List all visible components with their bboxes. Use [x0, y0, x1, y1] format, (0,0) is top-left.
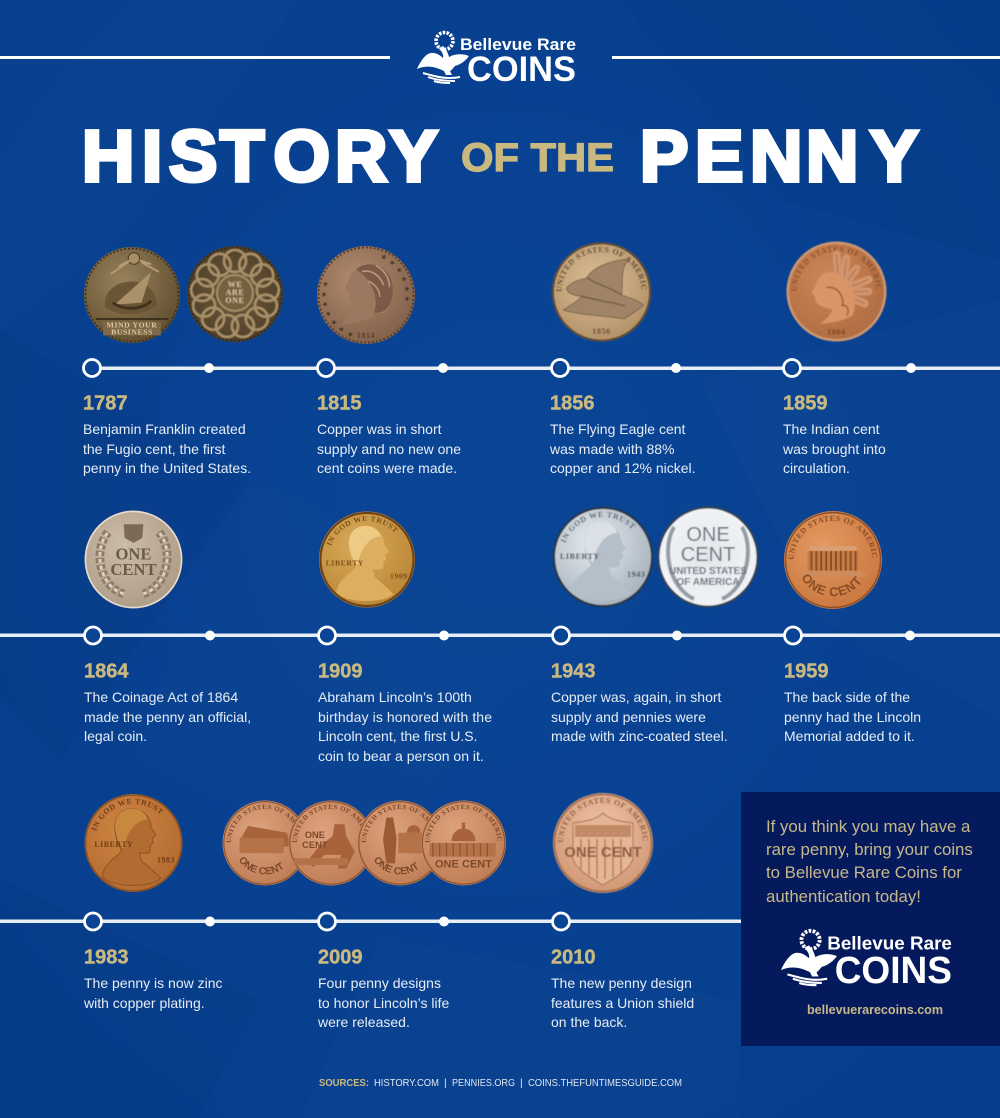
sources: HISTORY.COM: [374, 1077, 439, 1089]
sources: [319, 1077, 682, 1089]
logo: Bellevue Rare Coins: [417, 32, 576, 89]
entry 1856: The Flying Eagle cent: [550, 421, 686, 437]
coin: 1864 one cent wreath: CENT: [110, 560, 157, 579]
entry 2010: on the back.: [551, 1014, 627, 1030]
timeline row 3: [0, 913, 742, 930]
entry 1959: penny had the Lincoln: [784, 709, 921, 725]
sources: SOURCES:: [319, 1078, 369, 1089]
coin: 1983 lincoln: LIBERTY: [94, 840, 133, 849]
entry 1787: penny in the United States.: [83, 460, 251, 476]
entry 1864: legal coin.: [84, 728, 147, 744]
panel: call to action: [741, 792, 1000, 1046]
entry 1864: The Coinage Act of 1864: [84, 689, 238, 705]
coin: us capitol: ONE CENT: [435, 859, 492, 871]
coin: 1909 lincoln cent: LIBERTY: [326, 558, 364, 567]
logo: Bellevue Rare Coins: Bellevue Rare: [460, 35, 576, 54]
callout text: authentication today!: [766, 887, 921, 906]
entry 1983: 1983: [84, 946, 128, 968]
entry 1959: Memorial added to it.: [784, 728, 915, 744]
entry 1859: was brought into: [782, 441, 886, 457]
entry 1815: [317, 392, 461, 476]
coin: 2010 union shield: ONE CENT: [564, 844, 642, 861]
coin: Fugio cent back: ONE: [225, 296, 245, 305]
coin: 1943 steel front: 1943: [627, 570, 645, 579]
coin: log cabin: [222, 800, 298, 886]
coin: young lincoln reading: UNITED STATES OF AMERICA: [292, 804, 363, 842]
entry 2010: The new penny design: [551, 975, 692, 991]
entry 1787: [83, 392, 251, 476]
entry 2009: to honor Lincoln’s life: [318, 995, 449, 1011]
coin: 1959 lincoln memorial: UNITED STATES OF AMERICA: [788, 516, 878, 560]
entry 1983: [83, 946, 223, 1011]
entry 1983: with copper plating.: [83, 995, 205, 1011]
coin: 1909 lincoln cent: 1909: [390, 572, 408, 581]
coin: 1983 lincoln: IN GOD WE TRUST: [91, 798, 164, 831]
entry 1943: supply and pennies were: [551, 709, 706, 725]
coin: Fugio cent back: [187, 246, 283, 342]
coin: lincoln at capitol: [358, 800, 432, 886]
entry 2010: features a Union shield: [551, 995, 694, 1011]
coin: 1983 lincoln: 1983: [157, 856, 175, 865]
coin: Fugio cent front: BUSINESS: [111, 327, 153, 336]
entry 2010: 2010: [551, 946, 596, 968]
coin: 1859 indian head: [786, 240, 888, 342]
entry 2009: [317, 946, 449, 1030]
sources: PENNIES.ORG: [452, 1077, 515, 1089]
coin: 1856 flying eagle: [551, 242, 652, 342]
entry 1909: Lincoln cent, the first U.S.: [318, 728, 478, 744]
title: HISTORY: [82, 116, 438, 197]
coin: 1943 steel front: [552, 506, 654, 608]
coin: 1943 steel back: CENT: [681, 544, 735, 566]
entry 1856: 1856: [550, 392, 594, 414]
coin: lincoln at capitol: UNITED STATES OF AMERICA: [362, 804, 428, 842]
entry 1787: 1787: [83, 392, 128, 414]
entry 1856: copper and 12% nickel.: [550, 460, 696, 476]
entry 1943: 1943: [551, 660, 596, 682]
entry 1859: [782, 392, 886, 476]
title: [82, 116, 918, 197]
coin: Fugio cent front: [84, 247, 180, 343]
coin: 1943 steel back: OF AMERICA: [677, 577, 739, 588]
timeline row 2: [0, 627, 1000, 644]
coin: 1943 steel back: [658, 506, 758, 608]
header rule left: [0, 56, 390, 59]
callout text: rare penny, bring your coins: [766, 840, 973, 859]
title: OF THE: [461, 136, 614, 180]
entry 1943: made with zinc-coated steel.: [551, 728, 728, 744]
entry 1815: supply and no new one: [317, 441, 461, 457]
entry 1859: circulation.: [783, 460, 850, 476]
coin: 1815 classic head: ★★★★★★★: [321, 282, 352, 337]
entry 1815: cent coins were made.: [317, 460, 457, 476]
coin: lincoln at capitol: ONE CENT: [374, 857, 418, 874]
entry 1983: The penny is now zinc: [84, 975, 223, 991]
coin: 1859 indian head: 1864: [827, 328, 846, 336]
timeline row 1: [84, 360, 1000, 376]
coin: Fugio cent back: ARE: [226, 288, 244, 297]
entry 1909: Abraham Lincoln’s 100th: [318, 689, 472, 705]
entry 1864: made the penny an official,: [84, 709, 251, 725]
panel logo: Bellevue Rare: [827, 933, 952, 954]
coin: young lincoln reading: [288, 800, 366, 886]
entry 1859: The Indian cent: [783, 421, 880, 437]
panel logo: [781, 931, 952, 991]
callout text: [766, 817, 973, 906]
entry 2009: 2009: [318, 946, 362, 968]
coin: 1856 flying eagle: UNITED STATES OF AMERICA: [556, 246, 647, 292]
coin: 1909 lincoln cent: IN GOD WE TRUST: [326, 516, 398, 546]
coins: 2009 four lincoln designs: [222, 800, 506, 886]
callout text: If you think you may have a: [766, 817, 971, 836]
coin: 1943 steel back: UNITED STATES: [669, 566, 747, 577]
callout text: to Bellevue Rare Coins for: [766, 863, 962, 882]
logo: Bellevue Rare Coins: COINS: [467, 50, 576, 89]
entry 1856: was made with 88%: [549, 441, 675, 457]
entry 2009: Four penny designs: [318, 975, 441, 991]
coin: 1959 lincoln memorial: [784, 511, 882, 609]
entry 1909: 1909: [318, 660, 362, 682]
entry 1959: 1959: [784, 660, 828, 682]
coin: 1864 one cent wreath: ONE: [115, 545, 152, 564]
entry 1787: Benjamin Franklin created: [83, 421, 246, 437]
entry 1859: 1859: [783, 392, 828, 414]
entry 1959: [784, 660, 921, 744]
header rule right: [612, 56, 1000, 59]
entry 1909: birthday is honored with the: [318, 709, 492, 725]
coin: 1815 classic head: [317, 246, 415, 344]
entry 1909: [318, 660, 492, 764]
coin: log cabin: ONE CENT: [240, 857, 282, 874]
coin: 1959 lincoln memorial: ONE CENT: [802, 574, 860, 596]
entry 1787: the Fugio cent, the first: [83, 441, 226, 457]
sources: COINS.THEFUNTIMESGUIDE.COM: [528, 1077, 682, 1089]
entry 1864: 1864: [84, 660, 129, 682]
coin: Fugio cent front: MIND YOUR: [107, 321, 157, 330]
entry 2009: were released.: [317, 1014, 410, 1030]
coin: us capitol: [421, 800, 506, 886]
coin: 1943 steel front: LIBERTY: [560, 552, 600, 561]
entry 1815: 1815: [317, 392, 362, 414]
coin: Fugio cent back: WE: [228, 280, 242, 289]
coin: young lincoln reading: CENT: [302, 840, 328, 850]
coin: us capitol: UNITED STATES OF AMERICA: [425, 804, 502, 842]
coin: 1943 steel front: IN GOD WE TRUST: [560, 511, 636, 543]
entry 1943: Copper was, again, in short: [551, 689, 722, 705]
entry 1815: Copper was in short: [317, 421, 442, 437]
coin: 1909 lincoln cent: [319, 512, 415, 608]
coin: 1815 classic head: 1814: [357, 331, 375, 340]
entry 1864: [84, 660, 251, 744]
entry 1959: The back side of the: [784, 689, 910, 705]
coin: 1815 classic head: ★★★★★★: [381, 254, 410, 302]
coin: 1983 lincoln: [84, 794, 182, 892]
coin: 1859 indian head: UNITED STATES OF AMERICA: [790, 246, 882, 291]
coin: log cabin: UNITED STATES OF AMERICA: [226, 804, 296, 842]
entry 1909: coin to bear a person on it.: [318, 748, 484, 764]
website url: bellevuerarecoins.com: [807, 1002, 943, 1017]
coin: 1856 flying eagle: 1856: [592, 327, 611, 336]
entry 1856: [549, 392, 696, 476]
coin: young lincoln reading: ONE: [305, 830, 325, 840]
entry 1943: [551, 660, 728, 744]
coin: 2010 union shield: [552, 792, 654, 894]
title: PENNY: [640, 116, 918, 197]
coin: 2010 union shield: UNITED STATES OF AMERICA: [557, 797, 648, 842]
sources: |: [444, 1077, 447, 1089]
panel logo: COINS: [835, 949, 952, 991]
coin: 1864 one cent wreath: [84, 510, 182, 608]
entry 2010: [551, 946, 694, 1030]
coin: 1943 steel back: ONE: [686, 524, 730, 546]
sources: |: [520, 1077, 523, 1089]
